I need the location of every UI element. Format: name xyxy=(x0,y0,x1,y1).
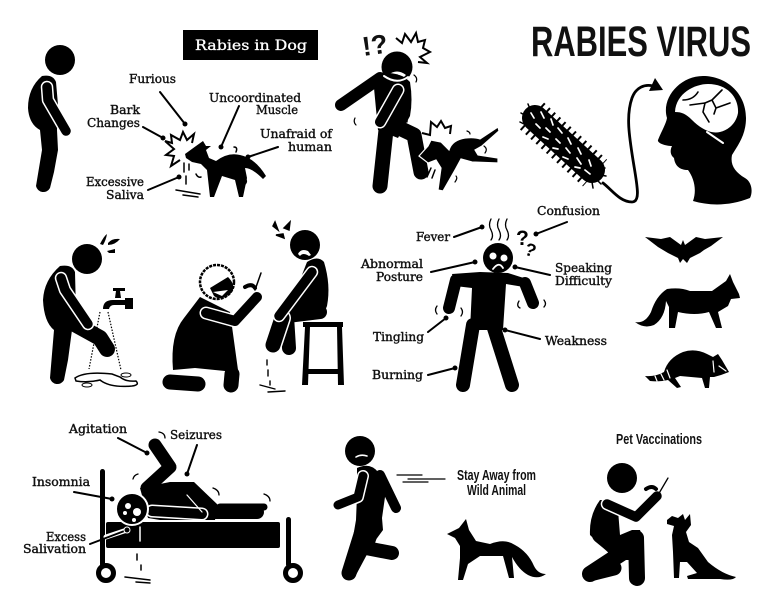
label: stay away from wild animal: Stay Away from xyxy=(457,467,536,484)
arrow: virus to brain xyxy=(603,78,663,202)
labels: rabies in dog: Changes xyxy=(87,116,140,130)
labels: seizure symptoms: Insomnia xyxy=(32,475,90,489)
labels: rabies in dog: Excessive xyxy=(86,175,144,189)
labels: symptoms: Difficulty xyxy=(555,274,612,288)
labels: symptoms: Weakness xyxy=(545,334,607,348)
label: stay away from wild animal xyxy=(457,467,536,499)
icon: hospital bed xyxy=(98,469,300,583)
labels: rabies in dog: Muscle xyxy=(256,103,298,117)
labels: symptoms: Abnormal xyxy=(360,257,423,271)
icon: person with symptoms: ? xyxy=(522,239,539,261)
icon: raccoon xyxy=(645,350,729,388)
icon: nurse with syringe xyxy=(170,265,261,385)
icon: walking person xyxy=(338,436,445,575)
icon: water tap and puddle xyxy=(75,288,137,387)
labels: seizure symptoms: Agitation xyxy=(68,422,127,436)
icon: person with symptoms xyxy=(436,219,546,385)
icon: rabies virus particle xyxy=(520,104,606,188)
icon: head with brain xyxy=(658,76,752,204)
labels: rabies in dog: Bark xyxy=(110,103,141,117)
icon: biting dog xyxy=(419,121,499,191)
labels: symptoms: Speaking xyxy=(555,261,612,275)
labels: symptoms: Confusion xyxy=(537,204,600,218)
labels: rabies in dog: Furious xyxy=(129,72,176,86)
labels: symptoms: Tingling xyxy=(373,330,424,344)
labels: seizure symptoms: Excess xyxy=(46,530,86,544)
icon: rabid dog xyxy=(165,132,266,197)
heading: rabies in dog xyxy=(183,30,318,60)
labels: rabies in dog: Uncoordinated xyxy=(209,91,301,105)
icon: standing person xyxy=(28,45,75,192)
icon: person vaccinating pet xyxy=(590,463,668,578)
icon: bat xyxy=(645,237,723,263)
icon: person bitten by dog: !? xyxy=(360,29,390,62)
labels: rabies in dog: human xyxy=(288,140,332,154)
labels: seizure symptoms: Seizures xyxy=(170,428,222,442)
labels: seizure symptoms xyxy=(23,422,222,556)
icon: person bitten by dog xyxy=(341,29,486,186)
heading: rabies in dog: Rabies in Dog xyxy=(195,38,307,54)
labels: rabies in dog xyxy=(86,72,334,202)
labels: rabies in dog: Saliva xyxy=(106,188,144,202)
labels: symptoms: Burning xyxy=(372,368,423,382)
label: stay away from wild animal: Wild Animal xyxy=(467,482,526,499)
labels: symptoms xyxy=(360,204,612,382)
labels: symptoms: Posture xyxy=(376,270,423,284)
labels: rabies in dog: Unafraid of xyxy=(260,127,334,141)
icon: sitting dog xyxy=(667,514,736,580)
labels: symptoms: Fever xyxy=(416,230,450,244)
icon: wild fox xyxy=(447,519,546,580)
icon: person washing wound xyxy=(43,234,120,384)
icon: fox xyxy=(635,274,740,328)
icon: person with symptoms: ? xyxy=(516,227,529,250)
labels: seizure symptoms: Salivation xyxy=(23,542,86,556)
icon: seated patient with wound xyxy=(260,222,344,392)
label: pet vaccinations: Pet Vaccinations xyxy=(616,431,702,448)
icon: patient having seizures xyxy=(116,432,270,541)
